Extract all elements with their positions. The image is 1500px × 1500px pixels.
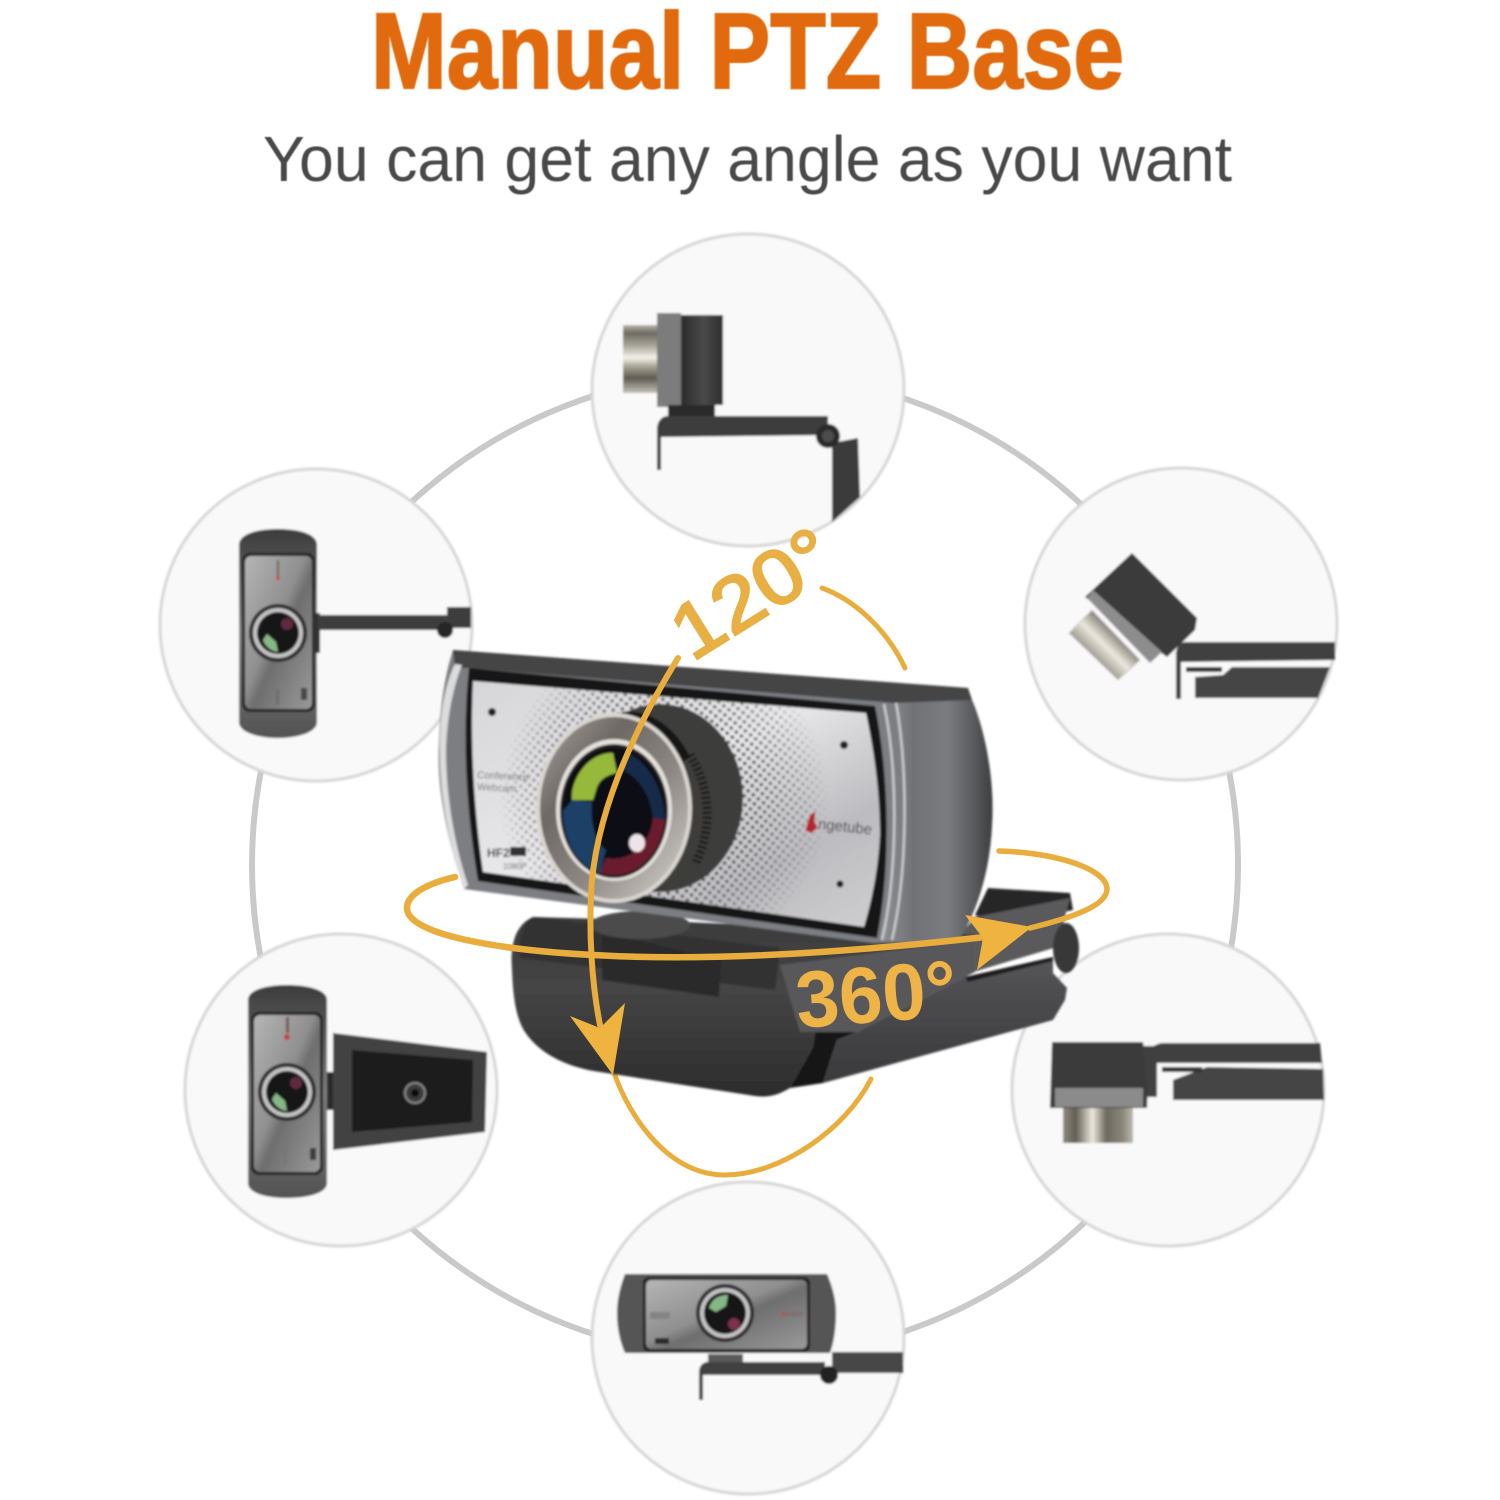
label: 360 degrees: 360° — [792, 944, 960, 1045]
lens barrel — [1063, 1108, 1133, 1143]
lens barrel — [577, 704, 743, 892]
folding clip — [699, 1352, 903, 1400]
circle backdrop — [592, 234, 904, 546]
circle backdrop — [1012, 934, 1324, 1246]
face text: resolution badge: 1080P — [503, 862, 526, 871]
folding clip — [313, 607, 471, 653]
connecting ring — [252, 372, 1238, 1358]
lens glass — [563, 748, 665, 875]
camera housing — [439, 650, 993, 943]
face text: resolution badge — [487, 846, 526, 871]
panel: right lower view, lens down — [1012, 934, 1324, 1246]
face text: conference webcam — [477, 770, 529, 795]
lens barrel — [1069, 610, 1140, 680]
folding clip — [657, 416, 860, 522]
lens — [258, 1063, 316, 1121]
lens — [249, 604, 307, 662]
brand logo — [805, 811, 873, 839]
folding clip — [1143, 1043, 1324, 1100]
folding clip — [1176, 642, 1335, 699]
halftone dots — [504, 686, 823, 914]
tilted camera body — [1085, 553, 1197, 663]
pivot neck — [590, 911, 690, 939]
face text: conference webcam: Webcam — [477, 782, 517, 795]
gold rotation arc: front portions — [407, 658, 1107, 1025]
camera body — [657, 313, 723, 416]
panel: bottom view, landscape front — [592, 1182, 904, 1494]
camera body — [617, 1274, 836, 1353]
lens front ring — [536, 713, 692, 903]
face text: resolution badge: HF2 — [487, 846, 510, 860]
camera body — [248, 985, 327, 1198]
base and clip — [512, 888, 1079, 1097]
silver faceplate — [472, 681, 880, 927]
microphone dots — [488, 708, 848, 888]
panel: left lower view, clip unfolded — [185, 934, 497, 1246]
black bezel — [466, 668, 887, 938]
arrowhead: 120 tilt — [570, 1003, 625, 1075]
lens barrel — [623, 325, 657, 393]
panel: top view, side profile — [592, 234, 904, 546]
camera body — [239, 529, 317, 738]
subtitle: You can get any angle as you want — [263, 123, 1232, 195]
circle backdrop — [592, 1182, 904, 1494]
circle backdrop — [1025, 468, 1337, 780]
brand logo: ngetube — [817, 816, 873, 838]
panel: right view, tilted up — [1025, 468, 1337, 780]
main webcam — [439, 640, 1079, 1097]
clip plate with tripod mount — [327, 1033, 487, 1150]
circle backdrop — [160, 469, 472, 781]
arrowhead: 360 rotation — [965, 915, 1032, 970]
panel: left view, front facing up — [160, 469, 472, 781]
lens — [696, 1284, 754, 1342]
label: 120 degrees: 120° — [655, 511, 849, 676]
gold rotation arc: back portions — [613, 588, 905, 1175]
camera body — [1050, 1042, 1148, 1108]
face text: conference webcam: Conference — [477, 770, 529, 784]
circle backdrop — [185, 934, 497, 1246]
